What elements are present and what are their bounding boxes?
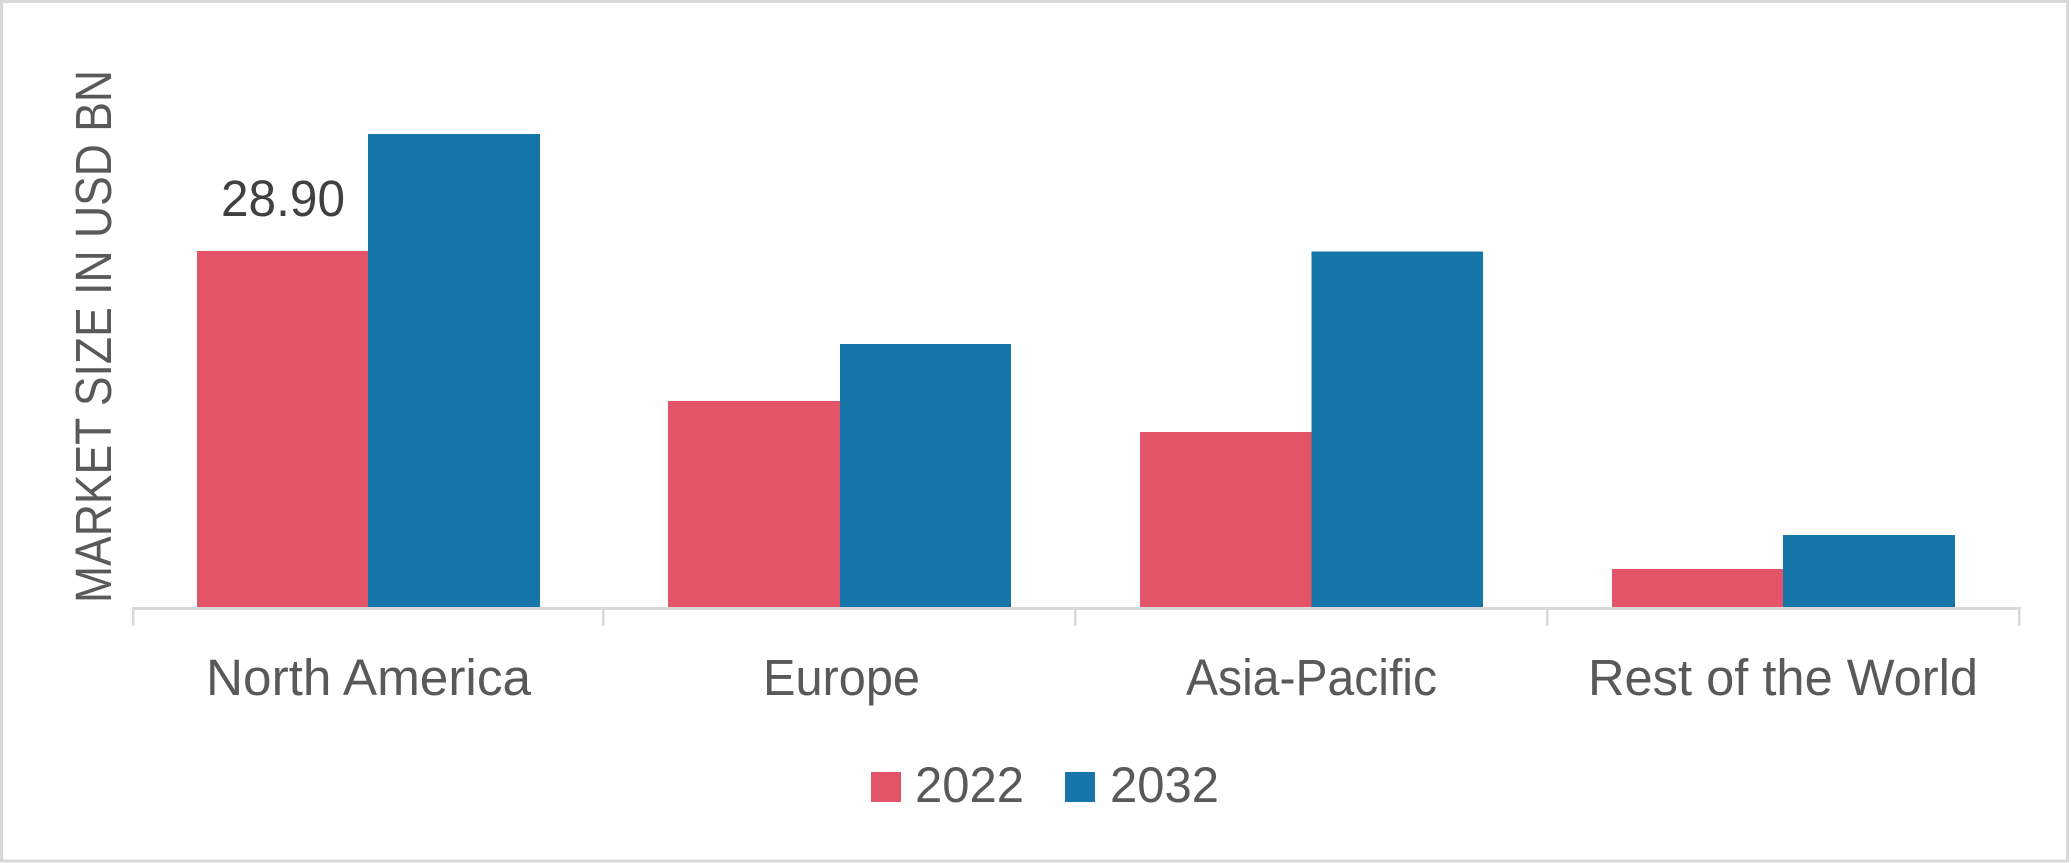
- category labels: Asia-Pacific: [1186, 649, 1437, 706]
- bars: Asia-Pacific: [1140, 252, 1483, 607]
- category labels: Europe: [763, 649, 920, 706]
- legend item: 2032: 2032: [1110, 757, 1219, 813]
- y-axis title: MARKET SIZE IN USD BN: [65, 70, 122, 603]
- category labels: Rest of the World: [1588, 649, 1978, 706]
- legend item: 2032: [1065, 757, 1219, 813]
- bars: Rest of the World: [1612, 535, 1955, 607]
- data label: North America 2022: 28.90: [221, 170, 345, 227]
- category labels: [206, 649, 1978, 706]
- x-axis line and ticks: [132, 607, 2021, 626]
- legend: [871, 757, 1219, 813]
- bars: North America: [197, 134, 540, 607]
- bars: Europe: [668, 344, 1011, 607]
- legend item: 2022: 2022: [915, 757, 1024, 813]
- category labels: North America: [206, 649, 532, 706]
